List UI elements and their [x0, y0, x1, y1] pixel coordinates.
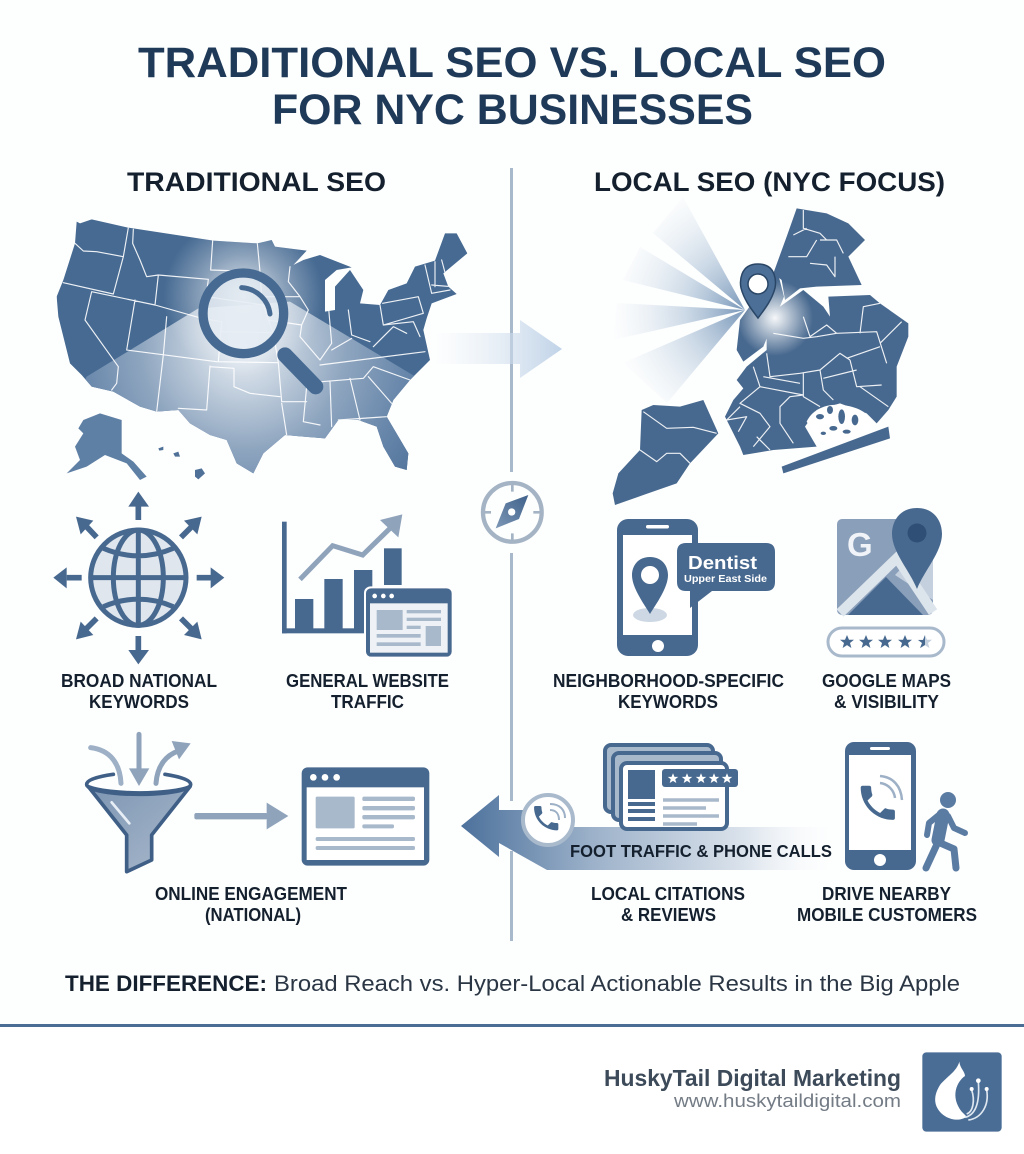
- label: neighborhood-specific keywords: NEIGHBORHOOD-SPECIFIC: [553, 671, 784, 691]
- icon: funnel: [87, 734, 191, 872]
- footer band: [0, 1024, 1024, 1154]
- map: New York City with location pin: [613, 197, 908, 505]
- summary line: Broad Reach vs. Hyper-Local Actionable Results in the Big Apple: [274, 971, 960, 996]
- label: online engagement: [155, 884, 347, 925]
- label: local citations and reviews: & REVIEWS: [621, 905, 716, 925]
- label: general website traffic: [286, 671, 449, 712]
- label: general website traffic: GENERAL WEBSITE: [286, 671, 449, 691]
- map: United States with magnifier: [56, 219, 468, 480]
- icon: location pin: [741, 264, 775, 318]
- label: online engagement: ONLINE ENGAGEMENT: [155, 884, 347, 904]
- title: TRADITIONAL SEO VS. LOCAL SEO: [138, 39, 886, 87]
- Alaska: [67, 413, 147, 480]
- Hawaii: [158, 447, 205, 479]
- label: broad national keywords: [61, 671, 217, 712]
- arrow: foot traffic and phone calls: [461, 795, 840, 870]
- icon: citation cards with stars: [605, 745, 738, 829]
- icon: phone with neighborhood search: Upper East Side: [684, 574, 767, 585]
- light rays: [613, 197, 745, 403]
- label: broad national keywords: KEYWORDS: [89, 692, 189, 712]
- summary line: THE DIFFERENCE:: [65, 971, 267, 996]
- icon: compass: [483, 483, 542, 542]
- label: neighborhood-specific keywords: [553, 671, 784, 712]
- footer brand text: www.huskytaildigital.com: [673, 1090, 901, 1111]
- label: neighborhood-specific keywords: KEYWORDS: [618, 692, 718, 712]
- footer brand text: [604, 1065, 901, 1111]
- icon: Google Maps tile with pin and rating: G: [847, 526, 873, 563]
- icon: browser window: [302, 767, 429, 866]
- label: drive nearby mobile customers: MOBILE CUSTOMERS: [797, 905, 977, 925]
- Jamaica Bay: [807, 405, 871, 447]
- label: general website traffic: TRAFFIC: [331, 692, 404, 712]
- icon: walking person: [926, 792, 965, 868]
- icon: magnifying glass: [203, 273, 316, 387]
- title: FOR NYC BUSINESSES: [272, 86, 753, 134]
- arrow: traditional to local: [435, 320, 562, 378]
- heading: local SEO: LOCAL SEO (NYC FOCUS): [594, 167, 945, 197]
- label: google maps and visibility: GOOGLE MAPS: [822, 671, 951, 691]
- label: broad national keywords: BROAD NATIONAL: [61, 671, 217, 691]
- label: online engagement: (NATIONAL): [205, 905, 301, 925]
- logo: [922, 1052, 1002, 1132]
- label: local citations and reviews: [591, 884, 745, 925]
- label: drive nearby mobile customers: [797, 884, 977, 925]
- Staten Island: [613, 400, 718, 505]
- icon: phone with neighborhood search: Dentist: [688, 552, 757, 573]
- star rating: [828, 628, 944, 656]
- arrow: funnel to website: [194, 803, 288, 829]
- boroughs: [725, 208, 908, 455]
- label: google maps and visibility: [822, 671, 951, 712]
- Rockaway: [782, 427, 890, 473]
- icon: traffic chart with website: [282, 514, 454, 659]
- speech bubble: [677, 543, 775, 608]
- heading: traditional SEO: TRADITIONAL SEO: [127, 167, 386, 197]
- icon: phone call badge: [523, 795, 573, 845]
- icon: Google Maps tile with pin and rating: [828, 508, 944, 656]
- icon: phone with neighborhood search: [617, 519, 775, 656]
- title: [138, 39, 886, 134]
- arrow: foot traffic and phone calls: FOOT TRAFFIC & PHONE CALLS: [570, 841, 832, 861]
- label: google maps and visibility: & VISIBILITY: [834, 692, 939, 712]
- label: local citations and reviews: LOCAL CITATIONS: [591, 884, 745, 904]
- divider line: [510, 168, 513, 941]
- label: drive nearby mobile customers: DRIVE NEARBY: [822, 884, 951, 904]
- icon: mobile phone with call: [845, 742, 916, 870]
- icon: globe with outward arrows: [53, 492, 224, 664]
- footer brand text: HuskyTail Digital Marketing: [604, 1065, 901, 1091]
